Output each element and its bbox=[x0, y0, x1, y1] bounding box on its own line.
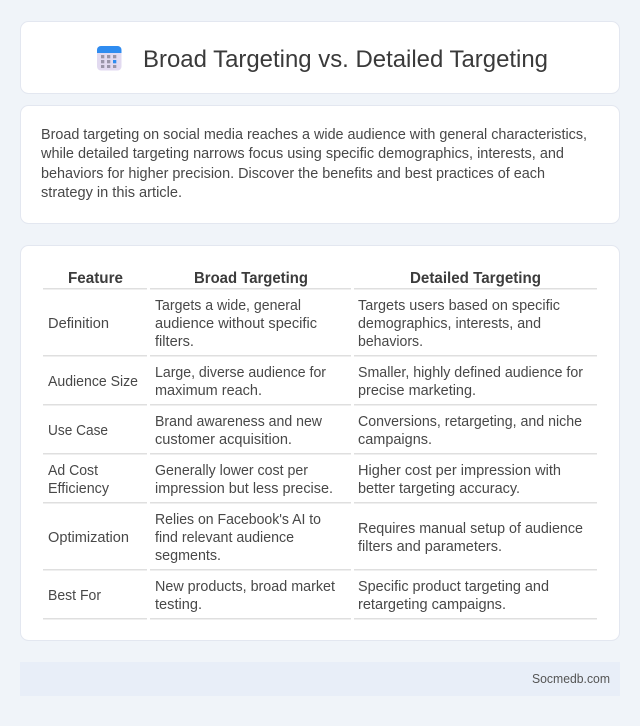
title: Broad Targeting vs. Detailed Targeting bbox=[143, 46, 548, 73]
row: definition bbox=[48, 298, 560, 350]
table header: Broad Targeting bbox=[194, 270, 308, 287]
row: use case: Brand awareness and new bbox=[155, 414, 323, 430]
row: use case: Conversions, retargeting, and niche bbox=[358, 414, 582, 430]
row: ad cost efficiency: better targeting accuracy. bbox=[358, 481, 520, 497]
row: use case: campaigns. bbox=[358, 432, 432, 448]
row: optimization bbox=[48, 512, 583, 564]
intro text: while detailed targeting narrows focus using specific demographics, interests, and bbox=[40, 146, 564, 162]
row: use case: Use Case bbox=[48, 423, 108, 439]
row: best for: testing. bbox=[155, 597, 202, 613]
panel: comparison table bbox=[20, 246, 620, 640]
row: best for: Best For bbox=[48, 588, 101, 604]
row: ad cost efficiency bbox=[48, 463, 561, 497]
row: definition: demographics, interests, and bbox=[358, 316, 541, 332]
row: ad cost efficiency: Generally lower cost per bbox=[155, 463, 308, 479]
row: optimization: Requires manual setup of audience bbox=[358, 521, 583, 537]
panel: title card bbox=[20, 22, 620, 94]
table header: Detailed Targeting bbox=[410, 270, 541, 287]
row: definition: Targets a wide, general bbox=[155, 298, 301, 314]
intro text bbox=[40, 127, 587, 201]
row: definition: behaviors. bbox=[358, 334, 423, 350]
row: best for: retargeting campaigns. bbox=[358, 597, 506, 613]
row: ad cost efficiency: impression but less precise. bbox=[155, 481, 333, 497]
footer credit: Socmedb.com bbox=[532, 672, 610, 686]
row: optimization: Optimization bbox=[48, 530, 129, 546]
row: optimization: Relies on Facebook's AI to bbox=[155, 512, 321, 528]
row: audience size: Smaller, highly defined audience for bbox=[358, 365, 583, 381]
row: definition: audience without specific bbox=[155, 316, 317, 332]
row: best for bbox=[48, 579, 549, 613]
row: use case: customer acquisition. bbox=[155, 432, 292, 448]
row: optimization: segments. bbox=[155, 548, 221, 564]
panel: intro bbox=[20, 106, 620, 224]
row: definition: filters. bbox=[155, 334, 194, 350]
row: ad cost efficiency: Efficiency bbox=[48, 481, 110, 497]
row: best for: New products, broad market bbox=[155, 579, 335, 595]
row: optimization: find relevant audience bbox=[155, 530, 294, 546]
intro text: Broad targeting on social media reaches a wide audience with general characteristics, bbox=[41, 127, 587, 143]
intro text: behaviors for higher precision. Discover the benefits and best practices of each bbox=[41, 166, 545, 182]
row: audience size: precise marketing. bbox=[358, 383, 476, 399]
footer bbox=[20, 662, 620, 696]
table header bbox=[68, 270, 541, 287]
row: audience size: Large, diverse audience for bbox=[155, 365, 326, 381]
row: definition: Targets users based on specific bbox=[358, 298, 560, 314]
row: optimization: filters and parameters. bbox=[358, 539, 502, 555]
row: use case bbox=[48, 414, 582, 448]
row: ad cost efficiency: Ad Cost bbox=[48, 463, 98, 479]
row: definition: Definition bbox=[48, 316, 109, 332]
row: audience size: maximum reach. bbox=[155, 383, 262, 399]
row: audience size bbox=[48, 365, 583, 399]
intro text: strategy in this article. bbox=[41, 185, 182, 201]
row: ad cost efficiency: Higher cost per impression with bbox=[358, 463, 561, 479]
icon: calendar bbox=[97, 46, 122, 70]
row: audience size: Audience Size bbox=[48, 374, 138, 390]
row: best for: Specific product targeting and bbox=[358, 579, 549, 595]
table header: Feature bbox=[68, 270, 123, 287]
